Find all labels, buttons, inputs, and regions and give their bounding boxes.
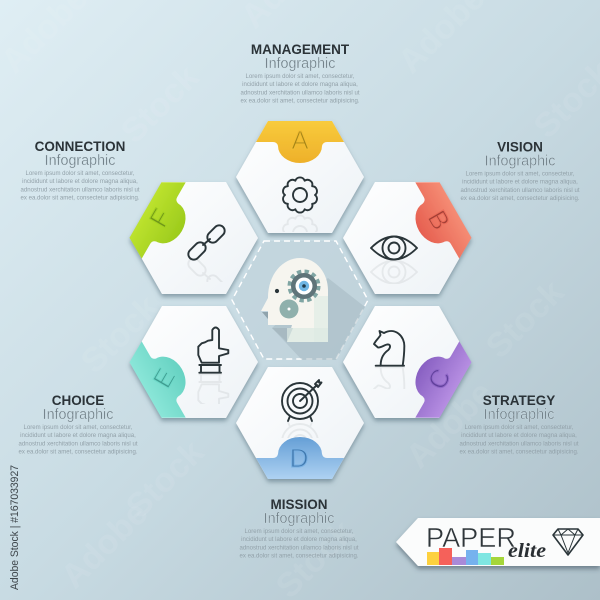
text block: choice: Infographic (43, 407, 113, 423)
panel: hexagon E (124, 306, 258, 428)
letter C: C (421, 363, 457, 395)
text block: vision: Infographic (485, 154, 555, 170)
text block: mission: adnostrud xerchitation ullamco laboris nisl ut (240, 546, 359, 552)
panel: hexagon B (343, 172, 477, 294)
watermark pattern: Adobe (54, 494, 155, 596)
text block: management: adnostrud xerchitation ullamco laboris nisl ut (241, 90, 360, 96)
text block: management: ex ea.dolor sit amet, consectetur adipisicing. (241, 99, 360, 105)
text block: connection: Infographic (45, 153, 115, 169)
text block: management: MANAGEMENT (251, 42, 350, 57)
text block: choice: adnostrud xerchitation ullamco laboris nisl ut (19, 442, 138, 448)
text block: vision: adnostrud xerchitation ullamco laboris nisl ut (461, 188, 580, 194)
watermark pattern: Stock (74, 288, 166, 381)
watermark pattern: Stock (114, 58, 206, 151)
text block: vision: incididunt ut labore et dolore magna aliqua, (462, 180, 578, 186)
watermark pattern: Stock (119, 433, 211, 526)
text block: mission: incididunt ut labore et dolore magna aliqua, (241, 537, 357, 543)
text block: management (241, 42, 360, 105)
logo colour bars (427, 548, 504, 565)
hexagon E tile (124, 306, 258, 428)
text block: choice (19, 393, 138, 456)
icon: chain link (187, 224, 226, 282)
text block: connection: adnostrud xerchitation ullamco laboris nisl ut (21, 188, 140, 194)
text block: strategy: Infographic (484, 407, 554, 423)
text block: strategy: STRATEGY (483, 393, 555, 408)
icon: eye (371, 236, 417, 284)
text block: strategy: ex ea.dolor sit amet, consectetur adipisicing. (460, 450, 579, 456)
text block: strategy: incididunt ut labore et dolore magna aliqua, (461, 433, 577, 439)
text block: connection: ex ea.dolor sit amet, consectetur adipisicing. (21, 196, 140, 202)
icon: chess knight (373, 330, 406, 389)
icon: target (281, 379, 322, 438)
central dashed hexagon (232, 241, 368, 359)
text block: mission (240, 497, 359, 560)
text block: connection: Lorem ipsum dolor sit amet, consectetur, (26, 171, 135, 177)
text block: choice: Lorem ipsum dolor sit amet, consectetur, (24, 425, 133, 431)
stock id caption: Adobe Stock | #167033927 (9, 465, 21, 590)
panel: hexagon F (124, 172, 258, 295)
text block: vision: ex ea.dolor sit amet, consectetur adipisicing. (461, 196, 580, 202)
hexagon B tile (343, 172, 477, 294)
text block: choice: CHOICE (52, 393, 104, 408)
text block: choice: ex ea.dolor sit amet, consectetur adipisicing. (19, 450, 138, 456)
hexagon F tile (124, 172, 258, 294)
text block: vision (461, 140, 580, 202)
letter F: F (143, 204, 177, 232)
text block: choice: incididunt ut labore et dolore magna aliqua, (20, 433, 136, 439)
text block: vision: Lorem ipsum dolor sit amet, consectetur, (466, 172, 575, 178)
text block: management: incididunt ut labore et dolore magna aliqua, (242, 82, 358, 88)
text block: mission: ex ea.dolor sit amet, consectetur adipisicing. (240, 554, 359, 560)
letter E: E (147, 363, 181, 393)
panel: hexagon C (343, 306, 477, 428)
hexagon A tile (236, 121, 364, 233)
logo script: elite (508, 540, 546, 562)
icon: pointing hand (198, 328, 228, 420)
icon: gear (282, 176, 318, 232)
panel: hexagon A (236, 121, 364, 251)
logo ribbon (396, 518, 600, 566)
letter D: D (290, 443, 308, 473)
watermark pattern: Adobe (399, 374, 500, 476)
text block: connection (21, 139, 140, 202)
text block: mission: MISSION (270, 497, 328, 512)
hexagon D tile (236, 367, 364, 479)
watermark pattern: Stock (479, 273, 571, 366)
text block: connection: CONNECTION (35, 139, 125, 154)
text block: strategy: adnostrud xerchitation ullamco laboris nisl ut (460, 442, 579, 448)
letter A: A (291, 125, 309, 155)
hexagon C tile (343, 306, 477, 428)
text block: strategy (460, 393, 579, 456)
text block: mission: Infographic (264, 511, 334, 527)
text block: mission: Lorem ipsum dolor sit amet, consectetur, (245, 529, 354, 535)
panel: hexagon D (236, 367, 364, 479)
logo wordmark: PAPER (426, 522, 516, 553)
letter B: B (422, 205, 456, 235)
text block: strategy: Lorem ipsum dolor sit amet, consectetur, (465, 425, 574, 431)
icon: diamond (553, 529, 583, 555)
text block: connection: incididunt ut labore et dolore magna aliqua, (22, 179, 138, 185)
logo: paper elite banner (396, 518, 600, 566)
text block: management: Lorem ipsum dolor sit amet, consectetur, (246, 74, 355, 80)
icon: head with gear (261, 258, 365, 360)
text block: vision: VISION (497, 140, 543, 154)
text block: management: Infographic (265, 56, 335, 72)
